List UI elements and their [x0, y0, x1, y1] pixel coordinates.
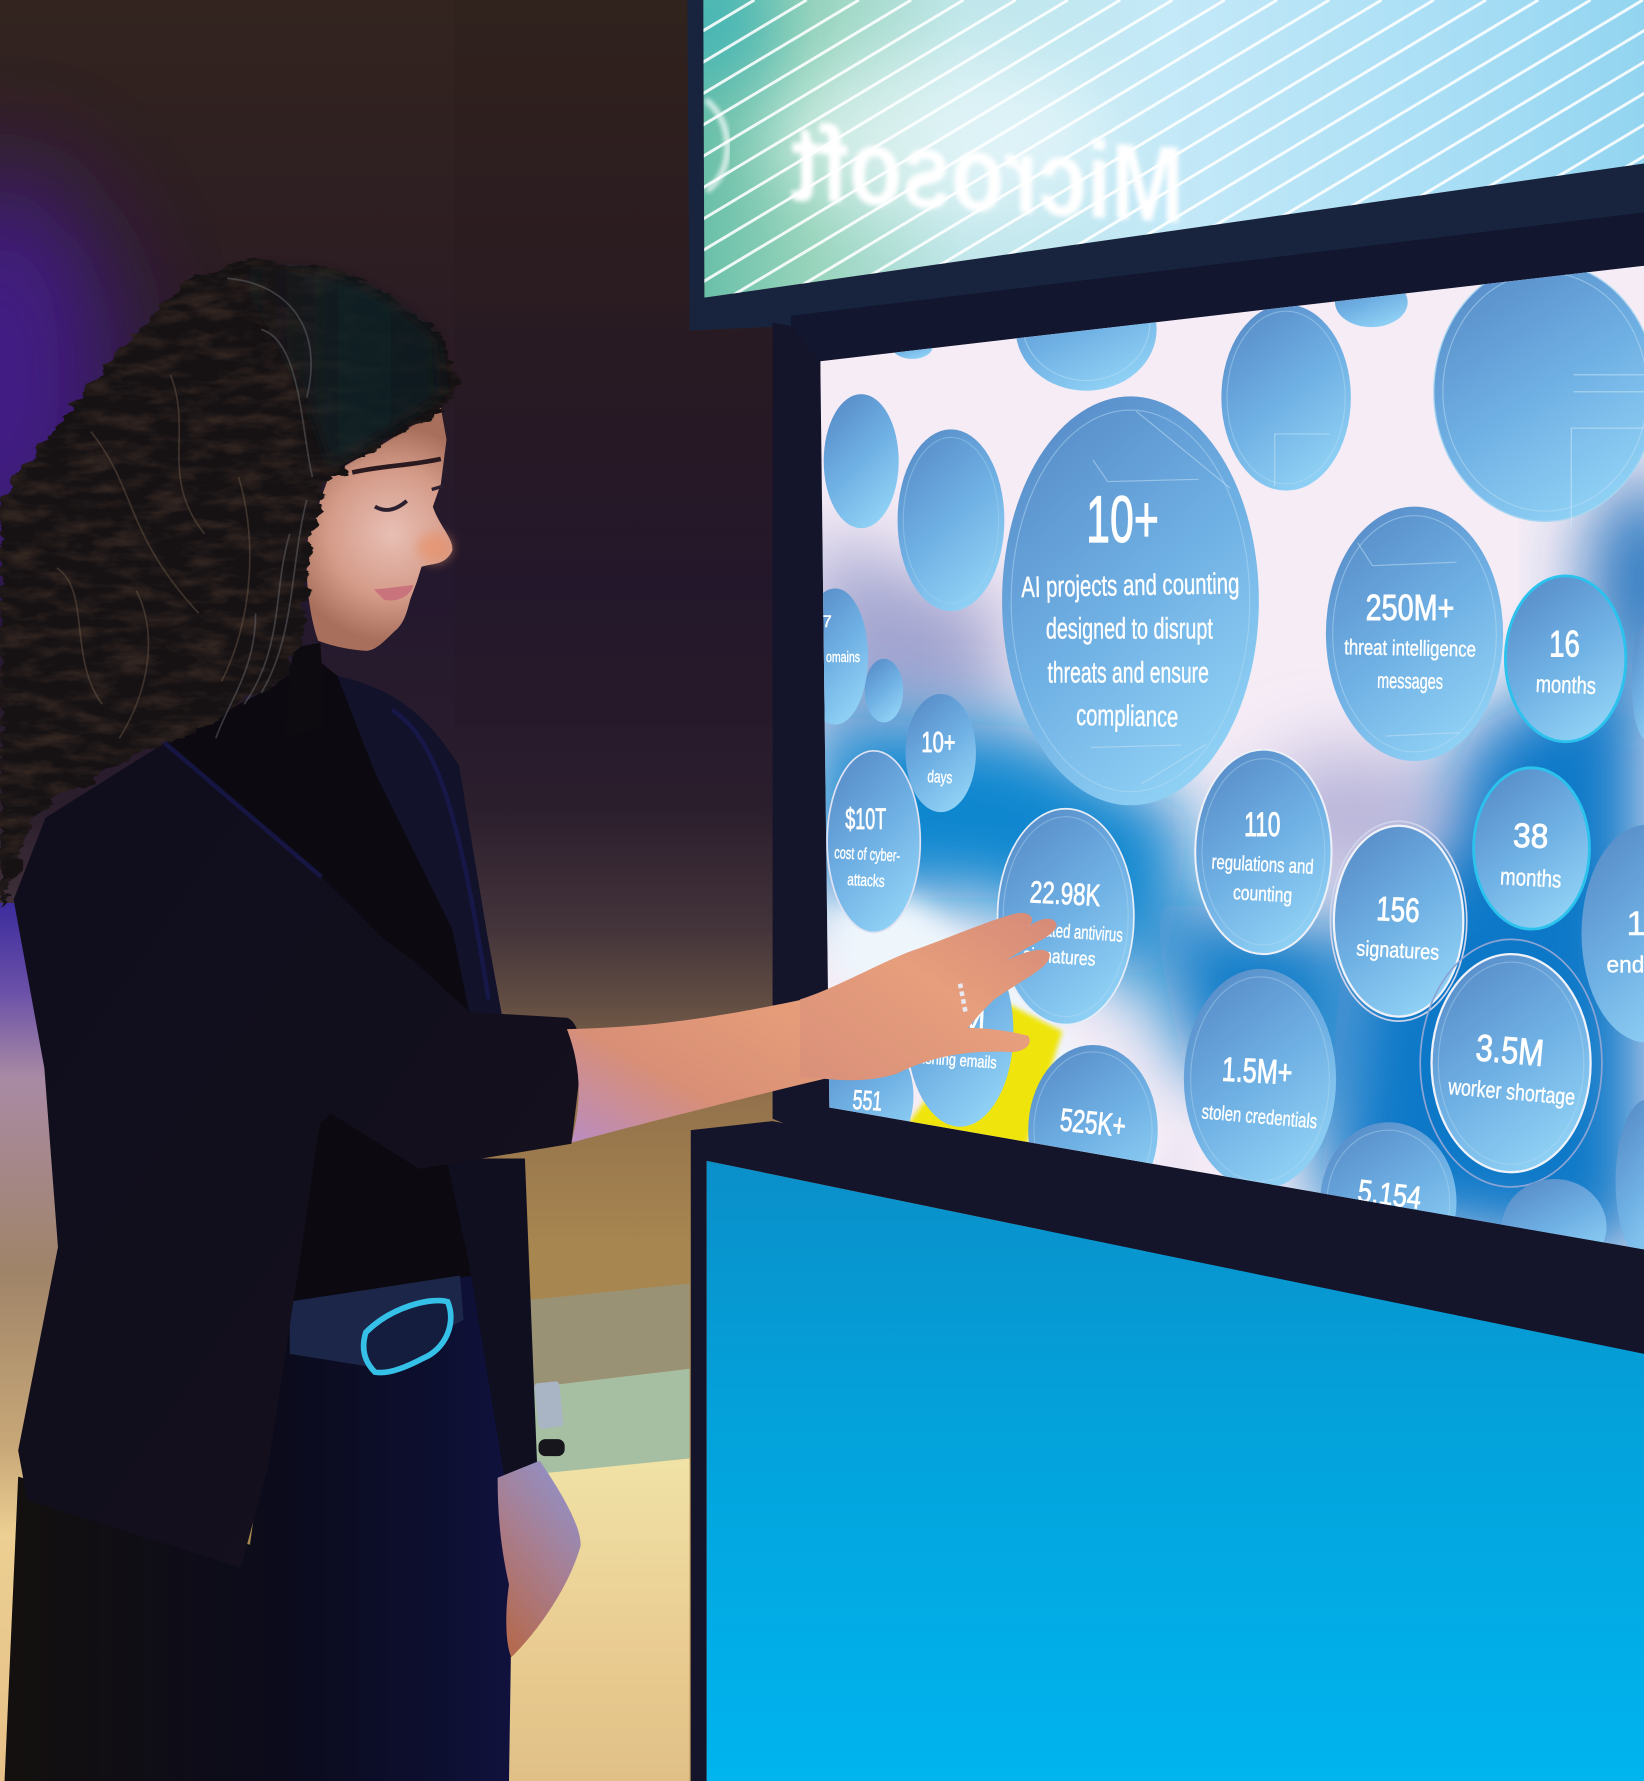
bubble: 1M phishing emails: phishing emails — [908, 1047, 997, 1072]
bubble: 3.5M worker shortage — [1420, 939, 1602, 1187]
face — [307, 408, 452, 651]
main touch screen frame — [773, 266, 1644, 1357]
bubble: 10+ days — [906, 694, 976, 812]
bubble: 10+ AI projects: 10+ — [1086, 482, 1159, 556]
bubble: large top right — [1434, 262, 1644, 529]
person — [0, 257, 1057, 1781]
bubble: 525K+ — [1028, 1045, 1158, 1215]
bubble: 22.98K antivirus signatures: 22.98K — [1029, 875, 1102, 913]
bubble: 10+ AI projects: compliance — [1076, 699, 1179, 734]
bubble: 7 domains — [823, 588, 868, 724]
bubble: 10+ AI projects: designed to disrupt — [1046, 612, 1213, 645]
bubble: 10+ days: days — [927, 767, 953, 787]
bubble: small clipped corner — [894, 348, 932, 359]
watch — [534, 1381, 565, 1456]
turtleneck — [284, 643, 325, 738]
bubble: $10T cost of cyber-attacks: cost of cyber- — [834, 843, 901, 866]
bubble: 7 domains: omains — [826, 650, 860, 666]
bubble: 38 months: months — [1499, 863, 1562, 894]
bubble: 250M+ threat intelligence: threat intelligence — [1344, 634, 1476, 662]
bubble: 16 months — [1505, 576, 1626, 742]
bubble: tiny — [865, 659, 903, 722]
bubble: 250M+ threat intelligence: 250M+ — [1366, 587, 1454, 628]
mirrored Microsoft wordmark: Microsoft — [791, 102, 1184, 247]
trousers — [5, 1255, 514, 1781]
bubble: $10T cost of cyber-attacks: attacks — [847, 870, 885, 891]
bubble: 551 — [818, 1032, 913, 1160]
bubble: 110 regulations: 110 — [1244, 806, 1280, 844]
bubble: 22.98K antivirus signatures: signatures — [1022, 945, 1096, 971]
hair crown sheen — [227, 266, 445, 466]
bubble: 110 regulations — [1195, 750, 1332, 954]
bubble: 1.5M+ stolen credentials — [1184, 969, 1336, 1189]
bubble: clipped right — [1632, 622, 1644, 741]
hand touching screen — [800, 913, 1057, 1080]
bubble: 110 regulations: counting — [1232, 881, 1293, 907]
bubble: 10+ AI projects: threats and ensure — [1048, 657, 1209, 690]
bubble: 156 signatures: signatures — [1356, 935, 1440, 965]
bubble: 525K+: 525K+ — [1058, 1101, 1128, 1144]
lower hand — [498, 1461, 581, 1657]
mirrored logo arc — [706, 100, 727, 191]
bubble: $10T cost of cyber-attacks — [827, 751, 920, 933]
bubble: 250M+ threat intelligence — [1326, 507, 1503, 761]
bubble: 5.154 — [1320, 1122, 1457, 1281]
bubble: 5.154: 5.154 — [1356, 1172, 1423, 1216]
top screen with mirrored Microsoft reflection — [688, 0, 1644, 361]
right collar band of cardigan — [337, 676, 502, 1017]
bubble: 16 months: 16 — [1549, 623, 1580, 665]
bubble: 1.5M+ stolen credentials: stolen credentials — [1201, 1100, 1318, 1133]
bubble: 156 signatures: 156 — [1375, 890, 1421, 930]
ring — [960, 984, 966, 1013]
bubble: $10T cost of cyber-attacks: $10T — [845, 803, 886, 836]
bubble: 16 months: months — [1535, 671, 1596, 700]
lower blue screen — [707, 1161, 1644, 1781]
lower panel frame — [691, 1121, 1644, 1781]
hair — [0, 257, 459, 909]
bubble: 250M+ threat intelligence: messages — [1377, 668, 1443, 694]
bubble: 22.98K antivirus signatures: updated antivirus — [1022, 919, 1124, 947]
black top — [165, 647, 500, 1301]
bubble: 551: 551 — [852, 1084, 883, 1117]
mouth — [374, 585, 414, 600]
bubble: empty left two — [898, 429, 1004, 611]
bubble: 38 months: 38 — [1513, 817, 1549, 856]
bubble: empty left — [824, 394, 899, 528]
bubble: 3.5M worker shortage: 3.5M — [1474, 1026, 1546, 1074]
brow and eyes — [352, 459, 441, 473]
forearm — [567, 997, 824, 1143]
screen gradient background — [812, 256, 1644, 1261]
bubble: 156 signatures — [1330, 821, 1467, 1021]
cardigan blue edge — [165, 710, 489, 1000]
bubble: 1M phishing emails — [907, 936, 1013, 1127]
lower right cardigan panel — [447, 1159, 537, 1478]
bubble: small clipped top — [1334, 293, 1408, 328]
hair highlights — [216, 278, 312, 738]
bubble: endpoints clipped right — [1582, 825, 1644, 1043]
bubble: 10+ AI projects — [1002, 396, 1259, 805]
bubble: bottom right clipped — [1616, 1099, 1644, 1263]
bubble: 1M phishing emails: 1M — [942, 1003, 986, 1037]
bubble: 7 domains: 7 — [822, 612, 832, 631]
belt — [290, 1276, 464, 1373]
bubble: 22.98K antivirus signatures — [998, 809, 1134, 1025]
bubble: bottom right small — [1502, 1179, 1607, 1274]
bubble: 3.5M worker shortage: worker shortage — [1446, 1073, 1576, 1110]
bubble: 38 months — [1474, 768, 1589, 929]
bubble: 10+ days: 10+ — [921, 727, 955, 759]
main touch screen — [802, 256, 1644, 1281]
bubble: clipped top — [1016, 322, 1157, 391]
bubble: top middle — [1221, 304, 1351, 491]
bubble: 110 regulations: regulations and — [1211, 851, 1314, 879]
bubble: 1.5M+ stolen credentials: 1.5M+ — [1221, 1051, 1293, 1092]
bubble: 10+ AI projects: AI projects and counting — [1021, 567, 1240, 604]
cardigan body and sleeve — [14, 743, 581, 1567]
